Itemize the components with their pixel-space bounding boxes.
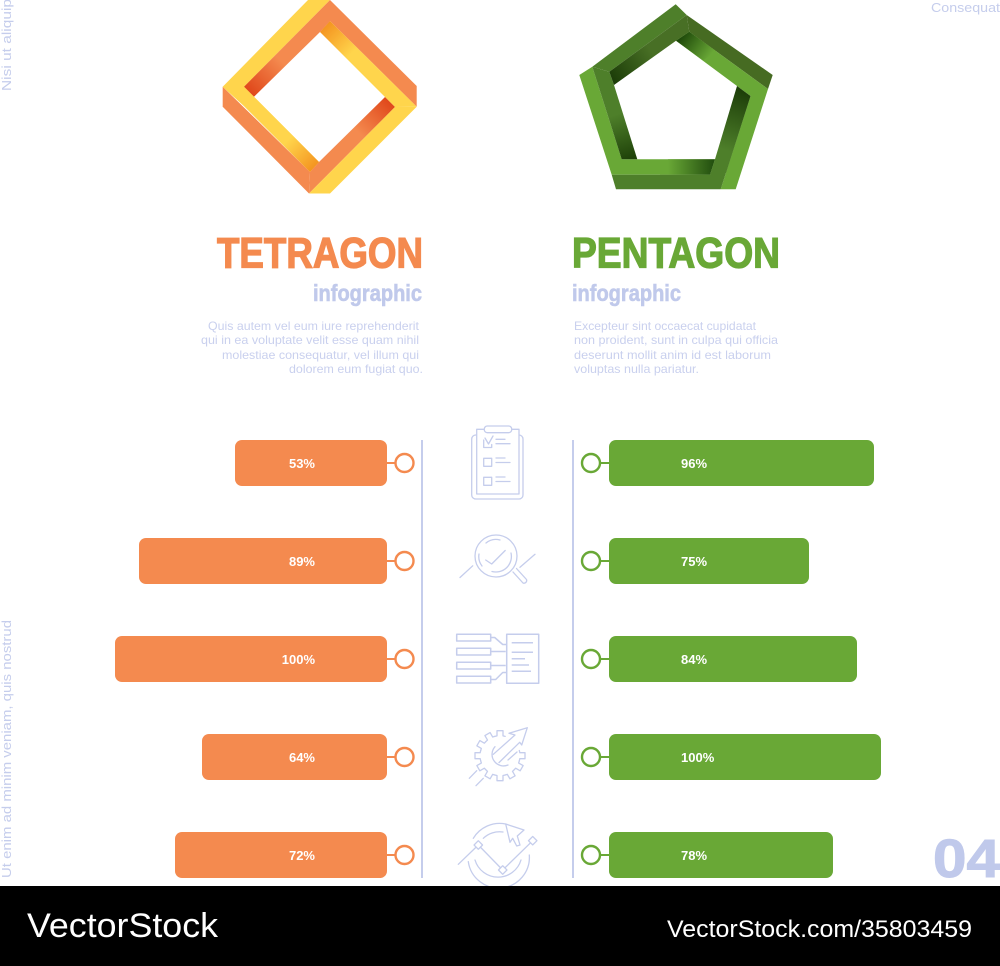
text block: tetragon description: [201, 319, 423, 376]
footer band: [0, 886, 1000, 966]
bar: tetragon 89%: [139, 538, 414, 584]
bar: pentagon 84%: 84%: [681, 652, 707, 667]
text block: pentagon description: non proident, sunt in culpa qui officia: [574, 333, 778, 347]
heading: pentagon: PENTAGON: [572, 230, 780, 278]
center axis lines: [422, 440, 573, 878]
bar: tetragon 89%: 89%: [289, 554, 315, 569]
text block: tetragon description: qui in ea voluptate velit esse quam nihil: [201, 333, 419, 347]
bar: tetragon 64%: 64%: [289, 750, 315, 765]
bar: tetragon 72%: 72%: [289, 848, 315, 863]
icon: list merging into document: [457, 634, 539, 683]
bar: pentagon 96%: 96%: [681, 456, 707, 471]
text block: pentagon description: deserunt mollit anim id est laborum: [574, 348, 771, 362]
text block: tetragon description: dolorem eum fugiat quo.: [289, 362, 423, 376]
bar: tetragon 53%: [235, 440, 414, 486]
bar: tetragon 100%: 100%: [282, 652, 315, 667]
text block: pentagon description: [574, 319, 778, 376]
icon: clipboard checklist: [472, 426, 523, 499]
bar: tetragon 53%: 53%: [289, 456, 315, 471]
icon: chart line in circle with arrow: [458, 823, 537, 888]
bar: pentagon 84%: [582, 636, 857, 682]
bar chart: tetragon: [115, 440, 414, 878]
sidebar text: top right: Consequat: [931, 0, 1000, 15]
bar: tetragon 72%: [175, 832, 414, 878]
text block: pentagon description: voluptas nulla pariatur.: [574, 362, 699, 376]
icon: gear with arrow: [469, 728, 527, 786]
text block: tetragon description: molestiae consequatur, vel illum qui: [222, 348, 419, 362]
bar: pentagon 100%: 100%: [681, 750, 715, 765]
bar: pentagon 96%: [582, 440, 874, 486]
icon: impossible tetragon: [223, 0, 417, 194]
icon: magnifier with check: [460, 535, 535, 583]
page number: 04: [933, 829, 1000, 889]
bar: pentagon 78%: [582, 832, 833, 878]
bar: pentagon 100%: [582, 734, 881, 780]
text block: tetragon description: Quis autem vel eum iure reprehenderit: [208, 319, 420, 333]
heading: tetragon: TETRAGON: [217, 230, 423, 278]
icon: impossible pentagon: [579, 4, 773, 189]
bar: pentagon 75%: [582, 538, 809, 584]
bar: pentagon 75%: 75%: [681, 554, 707, 569]
subheading: tetragon infographic: infographic: [313, 280, 422, 306]
footer logo text: VectorStock: [27, 907, 219, 945]
bar chart: pentagon: [582, 440, 881, 878]
subheading: pentagon infographic: infographic: [572, 280, 681, 306]
bar: tetragon 64%: [202, 734, 414, 780]
bar: pentagon 78%: 78%: [681, 848, 707, 863]
bar: tetragon 100%: [115, 636, 414, 682]
footer image id: VectorStock.com/35803459: [667, 916, 972, 943]
text block: pentagon description: Excepteur sint occaecat cupidatat: [574, 319, 757, 333]
